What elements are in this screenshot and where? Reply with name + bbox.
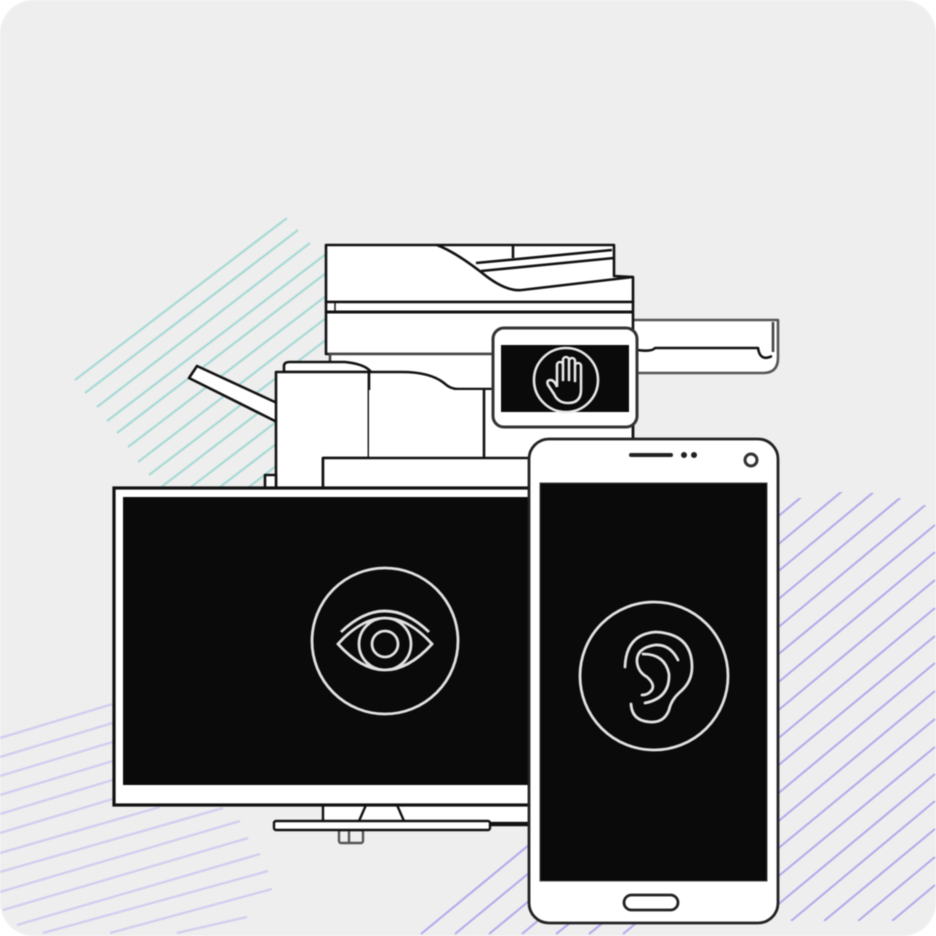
- monitor: [114, 488, 544, 843]
- finisher and base unit: [265, 354, 633, 490]
- phone body: [529, 439, 778, 923]
- phone screen: [540, 483, 767, 881]
- smartphone: [529, 439, 778, 923]
- document feeder: [326, 245, 633, 302]
- teal hatch pattern: [75, 218, 335, 488]
- control panel: [493, 328, 637, 427]
- icon: hand: [534, 348, 598, 412]
- printer: [189, 245, 778, 490]
- phone home button: [624, 895, 678, 910]
- icon: ear: [580, 602, 728, 750]
- purple hatch pattern right: [778, 492, 936, 922]
- output tray: [630, 320, 778, 373]
- icon: eye: [312, 568, 458, 714]
- monitor screen: [123, 497, 543, 785]
- pale lavender hatch pattern: [0, 703, 272, 933]
- monitor body: [114, 488, 544, 805]
- paper feed bar: [189, 366, 277, 422]
- monitor stand: [274, 803, 538, 843]
- scanner body: [326, 302, 633, 464]
- phone speaker and camera: [629, 452, 757, 466]
- purple hatch pattern bottom: [421, 840, 640, 934]
